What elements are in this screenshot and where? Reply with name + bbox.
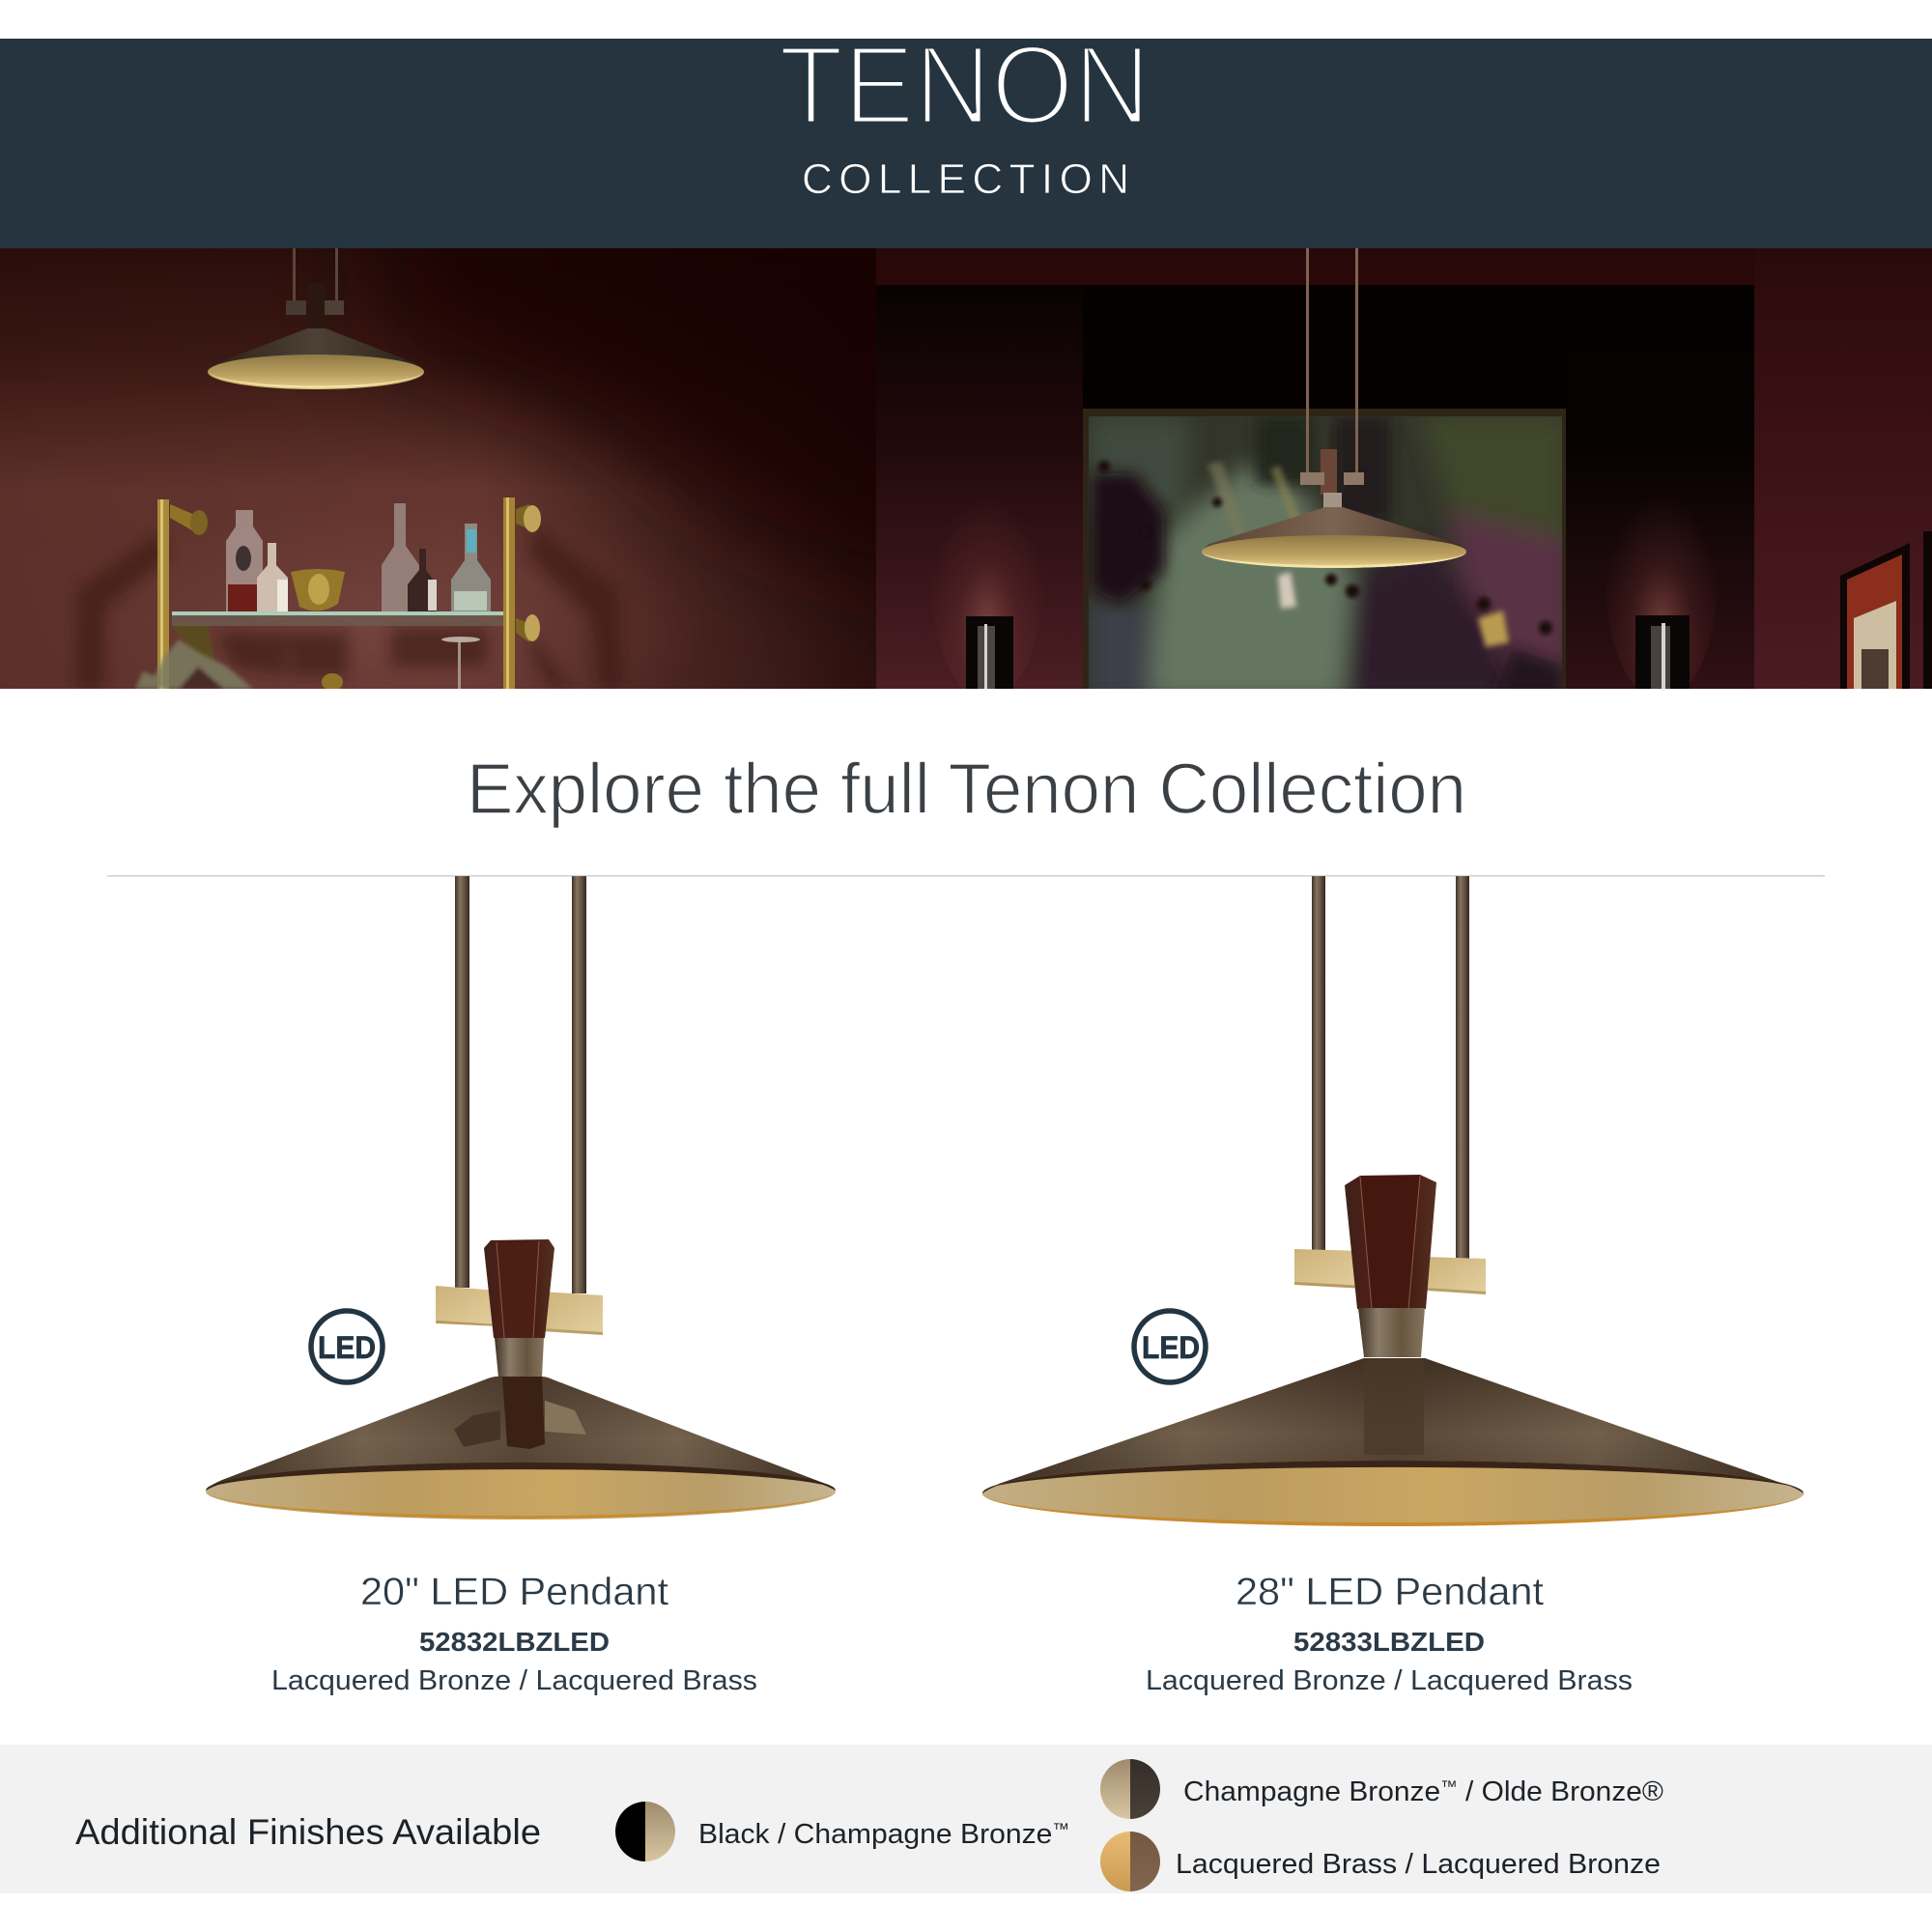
pendant lamp in dining photo [1202,248,1466,568]
panel: additional finishes [0,1745,1932,1893]
shelf shadows [75,526,623,689]
divider line [107,875,1825,877]
abstract painting [1083,409,1570,700]
title: TENON: TENON [779,22,1151,148]
product name: 20" LED Pendant [360,1571,668,1613]
product name: 28" LED Pendant [1236,1571,1544,1613]
swatch: lacquered brass / lacquered bronze [1100,1832,1160,1891]
bottles and brass cup [226,503,491,613]
LED badge [311,1311,383,1382]
pendant image: 28 inch [982,876,1804,1526]
model number: 52833LBZLED [1293,1627,1485,1657]
glass shelf [172,611,503,626]
LED badge: LED [1142,1330,1200,1365]
label: lacquered brass / lacquered bronze: Lacquered Brass / Lacquered Bronze [1176,1849,1661,1880]
label: champagne bronze / olde bronze: Champagne Bronze [1183,1776,1433,1807]
label: black / champagne bronze: ™ [1052,1820,1069,1838]
finish: Lacquered Bronze / Lacquered Brass [271,1665,757,1696]
LED badge: LED [318,1330,376,1365]
model number: 52832LBZLED [419,1627,610,1657]
label: black / champagne bronze: Black / Champagne Bronze [698,1819,1039,1850]
heading: Explore the full Tenon Collection: Explore the full Tenon Collection [467,749,1466,829]
finishes heading: Additional Finishes Available [75,1812,541,1852]
framed art on right wall [1840,531,1932,689]
LED badge [1134,1311,1206,1382]
pendant image: 20 inch [206,876,836,1520]
finish: Lacquered Bronze / Lacquered Brass [1146,1665,1633,1696]
pendant lamp in photo [208,248,424,389]
brass shelf unit [157,497,541,689]
product: 20 inch pendant [206,876,836,1696]
label: champagne bronze / olde bronze: / Olde Bronze® [1458,1776,1663,1807]
photo: bar shelf with pendant [0,248,876,689]
swatch: black / champagne bronze [615,1802,675,1861]
header band [0,22,1932,248]
wall sconce glow [943,524,1031,689]
swatch: champagne bronze / olde bronze [1100,1759,1160,1819]
wall sconces [966,615,1690,689]
subtitle: COLLECTION: COLLECTION [802,156,1129,203]
photo: dining room with painting and pendant [876,248,1932,700]
product: 28 inch pendant [982,876,1804,1696]
plant and wine glass [135,637,480,691]
label: champagne bronze / olde bronze: ™ [1440,1777,1458,1796]
